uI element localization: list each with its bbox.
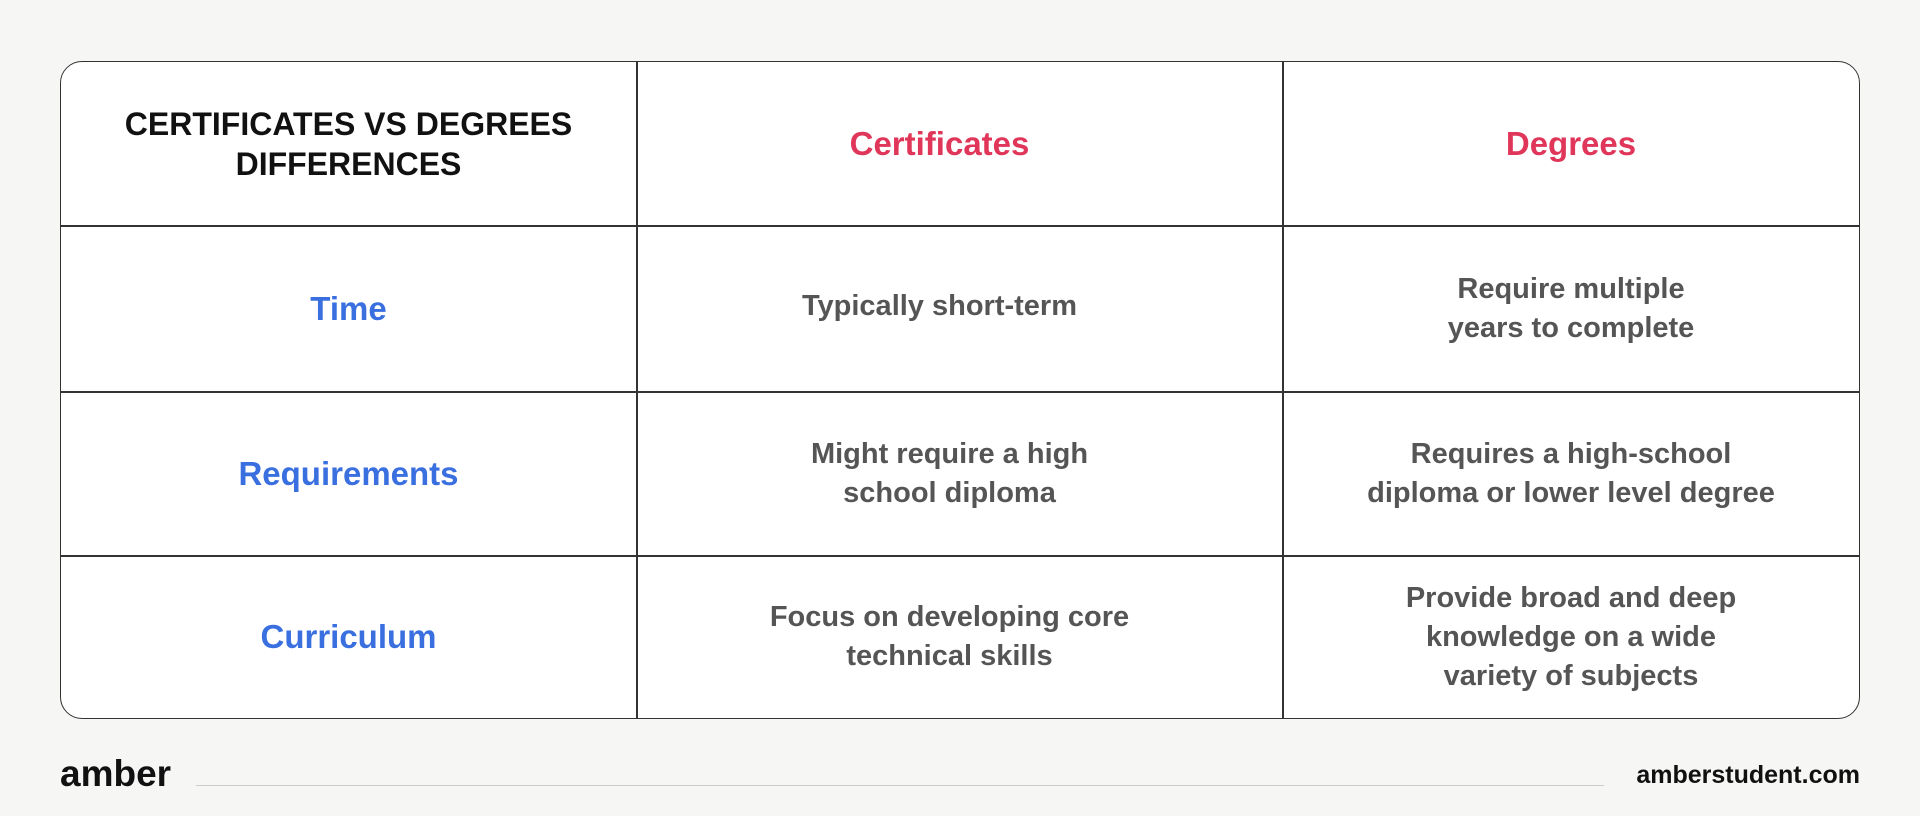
- cell: time degrees: years to complete: [1448, 312, 1694, 344]
- row label: requirements: Requirements: [238, 454, 459, 492]
- header: title: [125, 106, 572, 182]
- cell: requirements certificates: [811, 438, 1088, 508]
- cell: requirements degrees: [1367, 438, 1775, 508]
- footer logo: amber: amber: [60, 753, 171, 794]
- cell: requirements degrees: diploma or lower level degree: [1367, 476, 1775, 508]
- cell: time degrees: Require multiple: [1457, 272, 1685, 304]
- header: certificates: Certificates: [850, 124, 1029, 162]
- footer url: amberstudent.com: [1636, 761, 1860, 789]
- cell: time certificates: Typically short-term: [802, 290, 1077, 322]
- row label: time: Time: [310, 290, 387, 326]
- cell: curriculum certificates: technical skills: [846, 640, 1053, 672]
- header: degrees: Degrees: [1506, 124, 1636, 162]
- cell: curriculum certificates: Focus on developing core: [770, 601, 1129, 633]
- header: title: CERTIFICATES VS DEGREES: [125, 106, 572, 142]
- cell: requirements certificates: Might require a high: [811, 438, 1088, 470]
- header: title: DIFFERENCES: [236, 146, 461, 182]
- cell: requirements certificates: school diploma: [843, 476, 1056, 508]
- cell: curriculum degrees: [1406, 582, 1736, 692]
- cell: requirements degrees: Requires a high-school: [1411, 438, 1731, 470]
- cell: time degrees: [1448, 272, 1694, 344]
- table: [60, 61, 1860, 719]
- cell: curriculum certificates: [770, 601, 1129, 672]
- cell: curriculum degrees: knowledge on a wide: [1426, 620, 1716, 652]
- row label: curriculum: Curriculum: [260, 618, 437, 655]
- cell: curriculum degrees: variety of subjects: [1444, 660, 1698, 692]
- cell: curriculum degrees: Provide broad and deep: [1406, 582, 1736, 614]
